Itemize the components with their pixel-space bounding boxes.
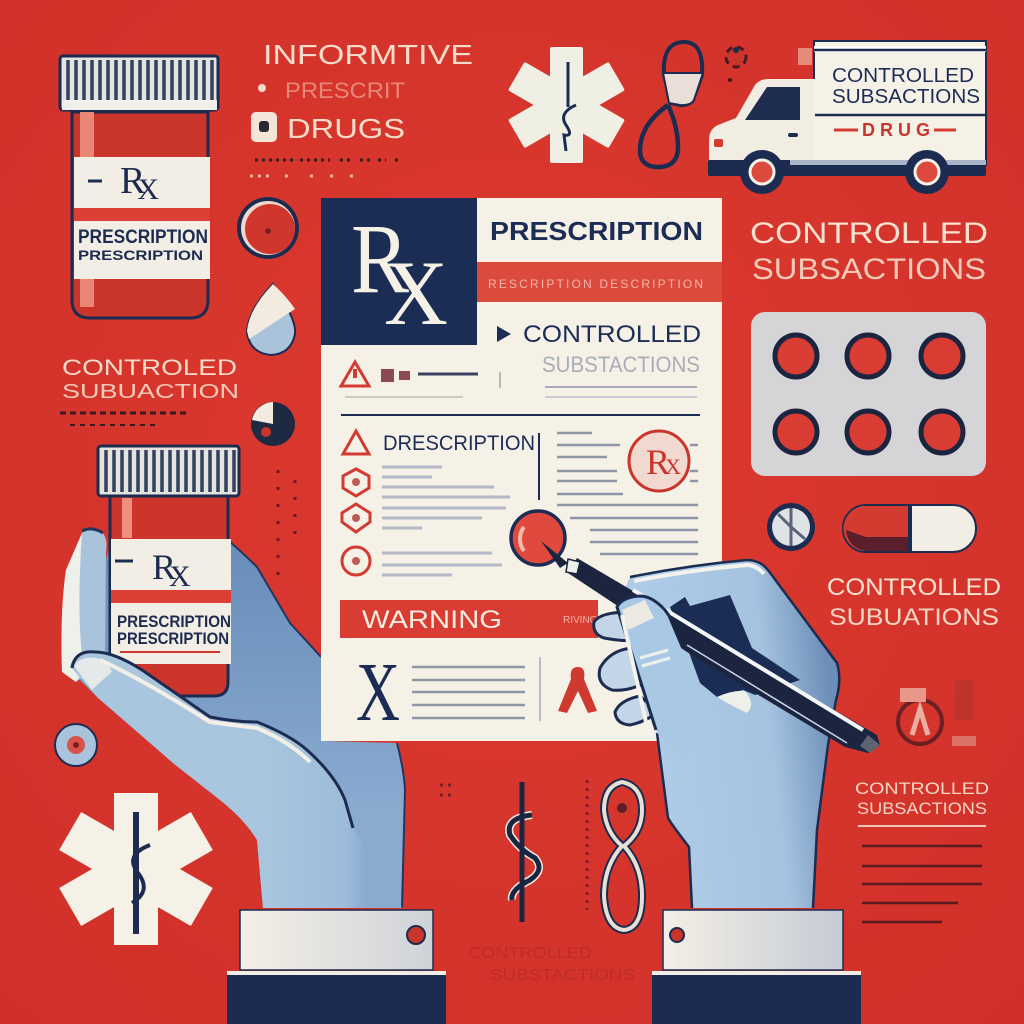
red header band: RESCRIPTION DESCRIPTION [488, 277, 703, 291]
document header: rx navy block: R [351, 203, 409, 314]
icon: left hand palm and back finger [62, 528, 405, 908]
icon: caduceus center bottom [509, 782, 539, 922]
icon: delivery truck: DRUG [862, 120, 930, 140]
lower rx and lines: X [356, 646, 400, 739]
icon: pen [511, 511, 880, 753]
icon: scored round pill [767, 503, 815, 551]
icon: delivery truck: CONTROLLED [832, 65, 974, 87]
icon: capsule [843, 505, 976, 552]
red header band [477, 262, 722, 302]
controlled heading: SUBSTACTIONS [542, 352, 700, 377]
text lines right [557, 433, 698, 554]
faded text: bottom caption [468, 945, 635, 984]
text: controlled substations small with lines: CONTROLLED [855, 779, 989, 798]
icon: small dim medical cluster [898, 680, 976, 746]
icon: medical star bottom-left [59, 793, 213, 945]
rx stamp [629, 431, 689, 491]
icon: black and white round pill [251, 402, 295, 446]
text: controlled substations small with lines [855, 779, 989, 922]
icon: front finger [617, 596, 697, 760]
icon: held prescription bottle: X [169, 560, 191, 593]
warning band: RIVING [563, 615, 598, 626]
panel: prescription document [321, 198, 722, 741]
icon: left shirt cuff [227, 910, 446, 1024]
icon: top-left prescription bottle: R [120, 160, 145, 202]
text: controlled substance left: CONTROLED [62, 355, 237, 380]
document header: rx navy block [321, 198, 477, 345]
icon: top-left prescription bottle: PRESCRIPTION [78, 247, 203, 263]
heading: controlled substances right: CONTROLLED [750, 217, 988, 250]
warning band: WARNING [362, 606, 502, 634]
icon: red round pill [237, 197, 299, 259]
icon: delivery truck [708, 41, 986, 194]
icon: nail crease [717, 691, 751, 713]
warning band [340, 600, 598, 638]
document header: rx navy block: X [384, 242, 448, 344]
lower rx and lines [356, 646, 597, 739]
text: controlled substance left [60, 355, 239, 425]
controlled heading: CONTROLLED [523, 321, 701, 348]
heading: informative drugs: DRUGS [287, 113, 405, 144]
icon: lower fingers [594, 612, 658, 725]
warning icons column [342, 431, 370, 575]
icon: top-left prescription bottle: PRESCRIPTION [78, 227, 208, 248]
icon: medical star top [508, 47, 625, 163]
text: controlled substance left: SUBUACTION [62, 381, 239, 403]
text: controlled substations right [827, 574, 1001, 631]
icon: right hand holding pen [594, 560, 839, 908]
icon: infinity pill ring top [640, 42, 703, 167]
faded text: bottom caption: SUBSTACTIONS [490, 967, 635, 984]
controlled heading [497, 321, 701, 397]
icon: held prescription bottle: PRESCRIPTION [117, 629, 229, 648]
icon: held prescription bottle: PRESCRIPTION [117, 612, 231, 631]
icon: top-left prescription bottle: X [137, 173, 159, 206]
text lines left [382, 467, 510, 575]
icon: blister pack [751, 312, 986, 476]
icon: held prescription bottle: R [152, 547, 176, 587]
icon: left hand thumb and wrist [70, 652, 402, 908]
heading: informative drugs: INFORMTIVE [263, 39, 473, 70]
icon: delivery truck: SUBSACTIONS [832, 86, 980, 108]
faded text: bottom caption: CONTROLLED [468, 945, 592, 962]
decorative dots [440, 780, 587, 910]
heading: informative drugs: PRESCRIT [285, 78, 405, 103]
rx stamp: X [665, 454, 681, 479]
heading: informative drugs [250, 39, 473, 176]
icon: dark palm shadow [670, 595, 800, 697]
icon: top-left prescription bottle [60, 56, 218, 318]
icon: right shirt cuff [652, 910, 861, 1024]
icon: small dark ring [726, 47, 746, 82]
icon: teardrop capsule [247, 284, 295, 355]
icon: infinity pill ring bottom [604, 782, 642, 930]
heading: controlled substances right: SUBSACTIONS [752, 253, 986, 286]
warning row top [341, 362, 500, 397]
decorative dots column [278, 470, 295, 585]
rx stamp: R [646, 442, 670, 482]
text: controlled substations right: SUBUATIONS [829, 604, 999, 631]
document title: PRESCRIPTION [490, 216, 703, 246]
heading: controlled substances right [750, 217, 988, 286]
icon: small ring left [55, 724, 97, 766]
text: controlled substations small with lines: SUBSACTIONS [857, 799, 987, 818]
prescription subheading: DRESCRIPTION [383, 432, 535, 455]
text: controlled substations right: CONTROLLED [827, 574, 1001, 601]
icon: held prescription bottle [98, 446, 239, 696]
